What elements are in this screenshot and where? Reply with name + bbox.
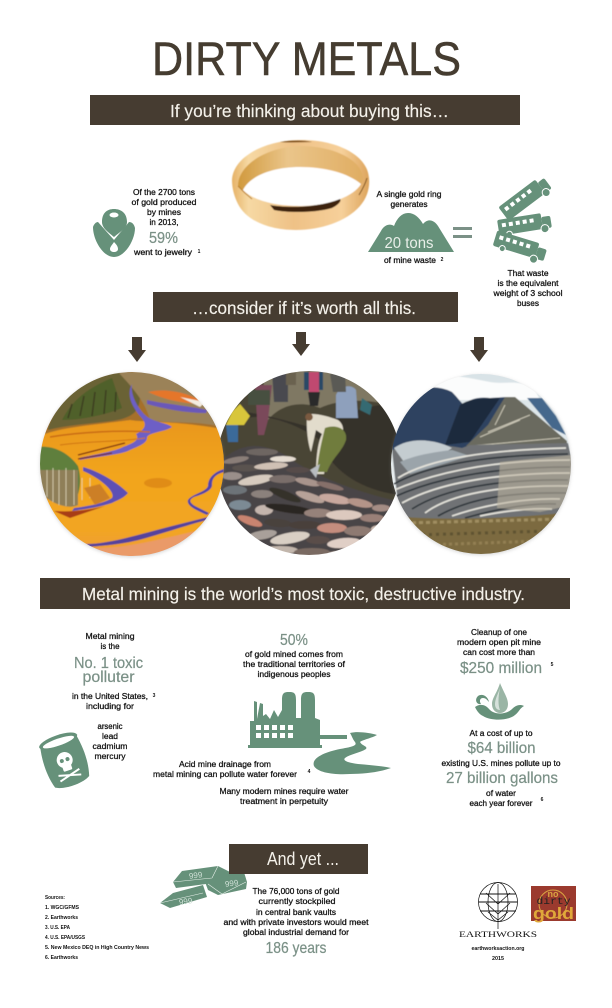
text: water pollution cost: $64 billion xyxy=(468,740,536,757)
text: 186 years of gold stockpiles: 186 years xyxy=(266,940,326,957)
column: no. 1 toxic polluter: including for xyxy=(86,701,134,711)
column: no. 1 toxic polluter: is the xyxy=(100,641,120,651)
column: no. 1 toxic polluter xyxy=(72,631,156,761)
banner: consider if it's worth all this xyxy=(153,292,458,322)
equals sign xyxy=(453,227,472,238)
photo circle: dead fish and workers xyxy=(220,371,396,555)
text: 50% from indigenous territories: 50% xyxy=(280,632,308,649)
text: weight of 3 school buses xyxy=(492,268,563,308)
text: weight of 3 school buses: buses xyxy=(517,298,539,308)
sources list: 2. Earthworks xyxy=(45,915,78,921)
text: cleanup costs: $250 million xyxy=(460,660,542,677)
title: DIRTY METALS xyxy=(152,32,461,85)
text: water pollution cost: 6 xyxy=(541,797,544,803)
stat: 20 tons of mine waste: generates xyxy=(390,199,428,209)
text: cleanup costs: Cleanup of one xyxy=(471,627,527,637)
banner: if you're thinking about buying this xyxy=(90,95,520,125)
sources list: 6. Earthworks xyxy=(45,955,78,961)
sources list: 4. U.S. EPA/USGS xyxy=(45,935,85,941)
sources list: 1. WGC/GFMS xyxy=(45,905,79,911)
text: water pollution cost: existing U.S. mines pollute up to xyxy=(442,758,561,768)
logo: Earthworks: earthworksaction.org xyxy=(472,946,525,952)
banner: metal mining is the most toxic industry xyxy=(40,578,570,609)
text: 1 xyxy=(198,249,201,255)
icon: gold bars: 999 xyxy=(224,878,239,889)
banner: and yet: And yet ... xyxy=(267,848,339,869)
text: 186 years of gold stockpiles: currently stockpiled xyxy=(258,896,336,906)
sources list: 5. New Mexico DEQ in High Country News xyxy=(45,945,149,951)
icon: toxic barrel with skull xyxy=(36,729,93,792)
text: 186 years of gold stockpiles: and with private investors would meet xyxy=(224,917,369,927)
text: in 2013, xyxy=(150,217,178,227)
icon: gold bars xyxy=(160,866,247,908)
column: no. 1 toxic polluter: 3 xyxy=(153,693,156,699)
text: 50% from indigenous territories: the traditional territories of xyxy=(243,659,346,669)
text: 50% from indigenous territories: indigenous peoples xyxy=(258,669,330,679)
logo: Earthworks: EARTHWORKS xyxy=(459,930,537,939)
column: no. 1 toxic polluter: No. 1 toxic xyxy=(74,655,143,672)
text: acid mine drainage: Acid mine drainage from xyxy=(179,759,271,769)
stat: 20 tons of mine waste: 2 xyxy=(441,257,444,263)
text: Of the 2700 tons xyxy=(133,187,195,197)
text: water treatment in perpetuity xyxy=(220,786,349,806)
icon: gold bars: 999 xyxy=(188,870,203,881)
column: no. 1 toxic polluter: cadmium xyxy=(92,741,128,751)
banner: consider if it's worth all this: …consider if it’s worth all this. xyxy=(192,298,416,318)
text xyxy=(132,187,201,257)
sources list: 3. U.S. EPA xyxy=(45,925,70,931)
stat: 20 tons of mine waste: 20 tons xyxy=(384,235,434,252)
icon: gold bars: 999 xyxy=(178,896,193,907)
photo circle: open pit mine xyxy=(388,370,574,560)
logo: Earthworks: 2015 xyxy=(492,956,504,962)
text: water treatment in perpetuity: treatment in perpetuity xyxy=(240,796,329,806)
stat: 20 tons of mine waste xyxy=(368,189,454,265)
icon: mountain xyxy=(368,213,454,252)
text: acid mine drainage xyxy=(153,759,311,779)
sources list: Sources: xyxy=(45,895,65,901)
text: water treatment in perpetuity: Many modern mines require water xyxy=(220,786,349,796)
text: weight of 3 school buses: weight of 3 school xyxy=(492,288,563,298)
column: no. 1 toxic polluter: mercury xyxy=(94,751,126,761)
text: went to jewelry xyxy=(133,247,193,257)
text: water pollution cost: At a cost of up to xyxy=(470,728,533,738)
sources list xyxy=(45,895,149,961)
column: no. 1 toxic polluter: Metal mining xyxy=(86,631,135,641)
text: of gold produced xyxy=(132,197,197,207)
photo circle: polluted orange river xyxy=(40,372,224,556)
stat: 20 tons of mine waste: of mine waste xyxy=(384,255,436,265)
text: 186 years of gold stockpiles: The 76,000 tons of gold xyxy=(252,886,340,896)
column: no. 1 toxic polluter: arsenic xyxy=(98,721,123,731)
banner: if you're thinking about buying this: If you’re thinking about buying this… xyxy=(170,101,449,121)
text: by mines xyxy=(147,207,181,217)
logo: no dirty gold: no xyxy=(548,889,559,899)
stat: 59% went to jewelry xyxy=(93,187,201,257)
text: acid mine drainage: 4 xyxy=(308,769,311,775)
arrow: to polluted river xyxy=(128,337,146,362)
column: no. 1 toxic polluter: in the United States, xyxy=(72,691,148,701)
logo: no dirty gold: dirty xyxy=(536,896,570,908)
text: water pollution cost: each year forever xyxy=(470,798,533,808)
text: cleanup costs: can cost more than xyxy=(463,647,535,657)
text: water pollution cost xyxy=(442,728,561,808)
text: 186 years of gold stockpiles: in central bank vaults xyxy=(256,907,336,917)
text: cleanup costs: 5 xyxy=(551,662,554,668)
text: water pollution cost: of water xyxy=(486,788,516,798)
arrow: to dead fish xyxy=(292,332,310,356)
column: no. 1 toxic polluter: lead xyxy=(102,731,118,741)
text: 59% xyxy=(149,230,178,247)
arrow: to open pit mine xyxy=(470,337,488,362)
text: weight of 3 school buses: is the equivalent xyxy=(498,278,559,288)
icon: factory polluting river xyxy=(248,692,391,774)
column: no. 1 toxic polluter: polluter xyxy=(82,669,135,686)
icon: three school buses xyxy=(491,175,554,266)
text: 50% from indigenous territories xyxy=(243,632,346,679)
text: water pollution cost: 27 billion gallons xyxy=(446,770,558,787)
stat: 20 tons of mine waste: A single gold ring xyxy=(376,189,442,199)
text: cleanup costs: modern open pit mine xyxy=(457,637,541,647)
logo: no dirty gold xyxy=(531,886,576,923)
icon: water drop xyxy=(475,683,524,720)
logo: no dirty gold: gold xyxy=(533,904,574,923)
logo: Earthworks xyxy=(459,882,537,962)
icon: necklace on bust xyxy=(93,209,135,257)
text: 50% from indigenous territories: of gold mined comes from xyxy=(245,649,343,659)
photo: gold ring xyxy=(232,140,369,230)
text: cleanup costs xyxy=(457,627,554,677)
banner: metal mining is the most toxic industry: Metal mining is the world’s most toxic, destructive industry. xyxy=(82,584,525,604)
text: 186 years of gold stockpiles xyxy=(224,886,369,957)
text: acid mine drainage: metal mining can pollute water forever xyxy=(153,769,297,779)
text: 186 years of gold stockpiles: global industrial demand for xyxy=(243,927,349,937)
text: weight of 3 school buses: That waste xyxy=(508,268,549,278)
banner: and yet xyxy=(229,844,368,874)
